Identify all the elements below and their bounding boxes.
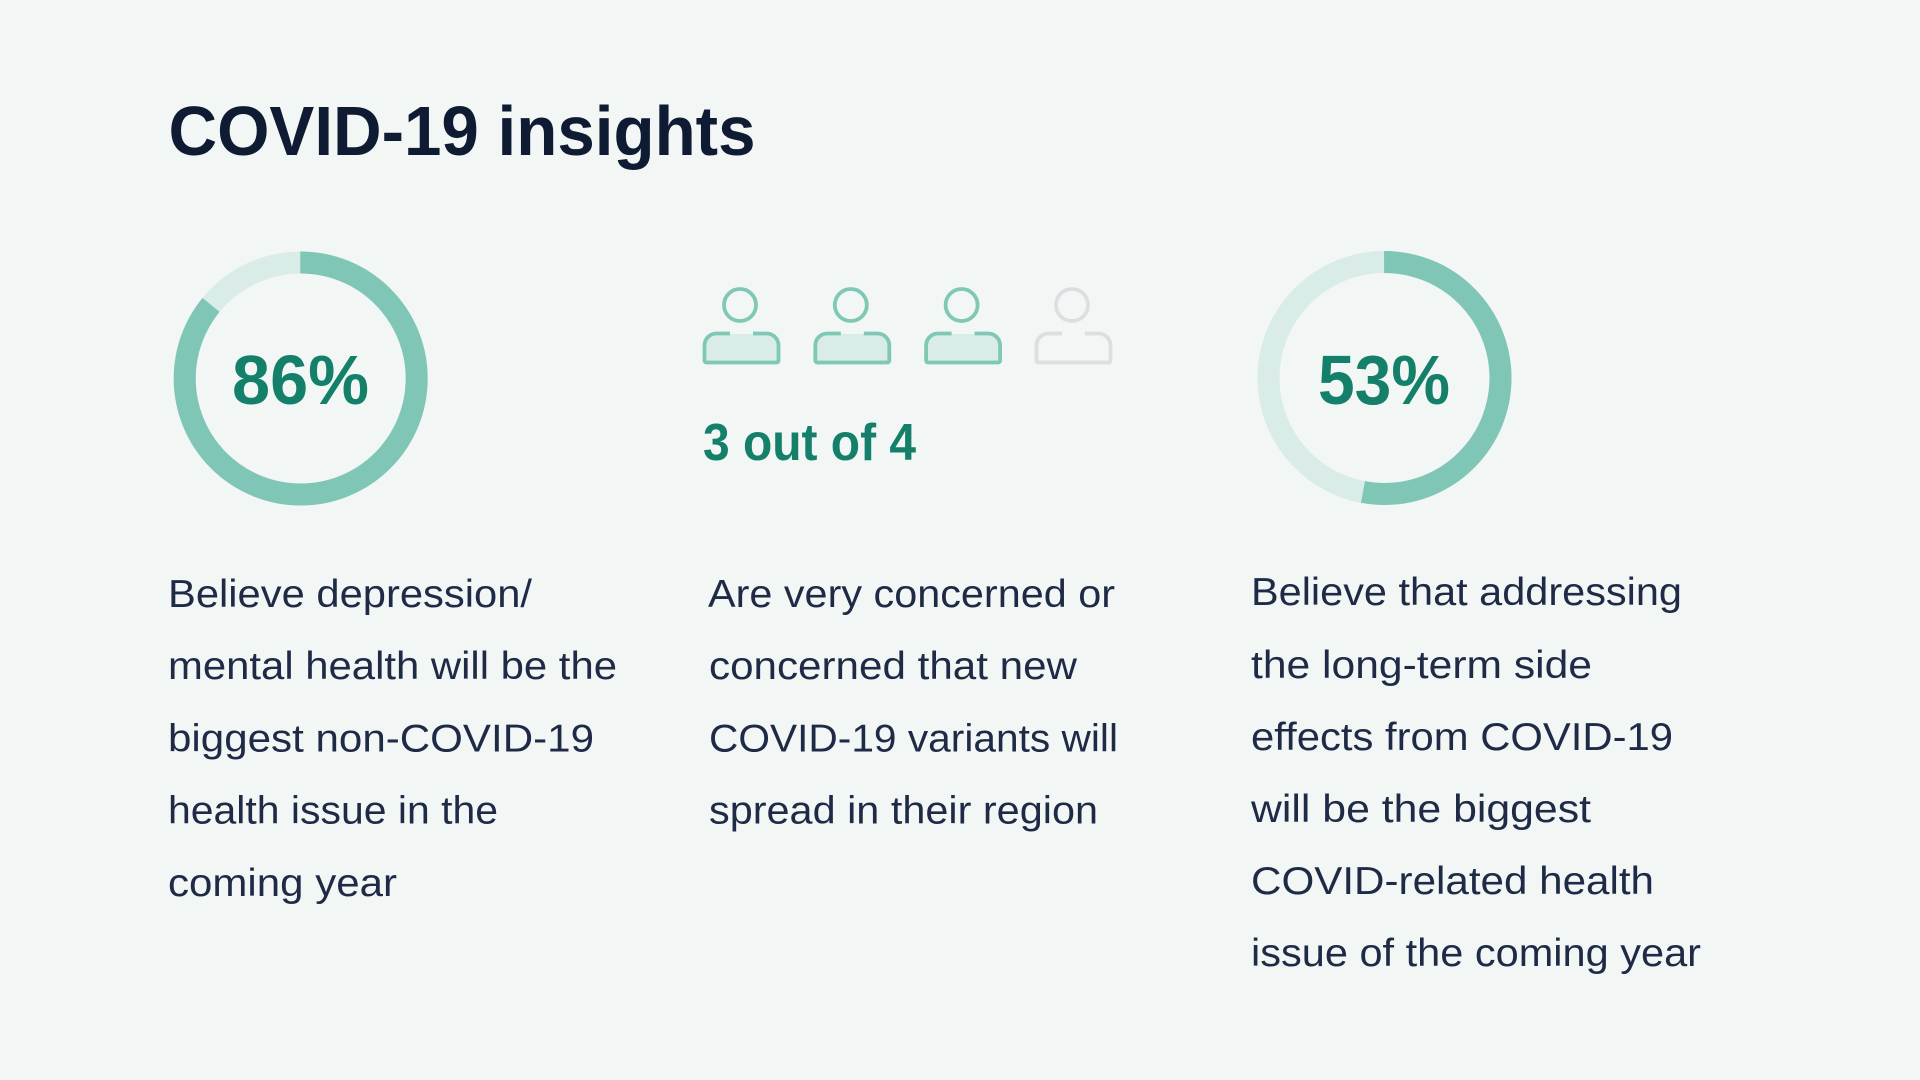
text block: new variants concern: Are very concerned or	[708, 573, 1115, 616]
donut chart: 86%	[185, 262, 417, 494]
text block: new variants concern: COVID-19 variants will	[709, 718, 1118, 760]
people icons: 3 of 4 highlighted	[704, 289, 1110, 362]
text block: depression and mental health: health issue in the	[168, 790, 498, 832]
text block: long-term side effects: the long-term side	[1251, 644, 1592, 687]
text block: depression and mental health: biggest non-COVID-19	[168, 718, 594, 760]
title: COVID-19 insights	[168, 92, 756, 170]
stat label: 3 out of 4: 3 out of 4	[703, 414, 916, 472]
text block: long-term side effects: COVID-related health	[1251, 860, 1654, 903]
text block: depression and mental health: coming year	[168, 862, 397, 905]
donut chart: 86%: 86%	[232, 341, 369, 419]
text block: long-term side effects: effects from COVID-19	[1251, 716, 1673, 759]
text block: new variants concern: spread in their region	[709, 790, 1098, 832]
text block: depression and mental health: Believe depression/	[168, 573, 532, 616]
text block: new variants concern	[708, 573, 1118, 832]
text block: long-term side effects: Believe that addressing	[1251, 571, 1682, 614]
icon: person 1	[704, 289, 778, 362]
text block: new variants concern: concerned that new	[709, 645, 1078, 688]
donut chart: 53%	[1268, 262, 1500, 494]
text block: long-term side effects	[1250, 571, 1701, 975]
text block: long-term side effects: will be the biggest	[1250, 788, 1591, 831]
text block: depression and mental health: mental health will be the	[168, 645, 617, 688]
icon: person 2	[815, 289, 889, 362]
text block: depression and mental health	[168, 573, 617, 905]
icon: person 3	[926, 289, 1000, 362]
text block: long-term side effects: issue of the coming year	[1251, 932, 1701, 975]
donut chart: 53%: 53%	[1318, 341, 1450, 419]
icon: person 4 (inactive)	[1036, 289, 1110, 362]
